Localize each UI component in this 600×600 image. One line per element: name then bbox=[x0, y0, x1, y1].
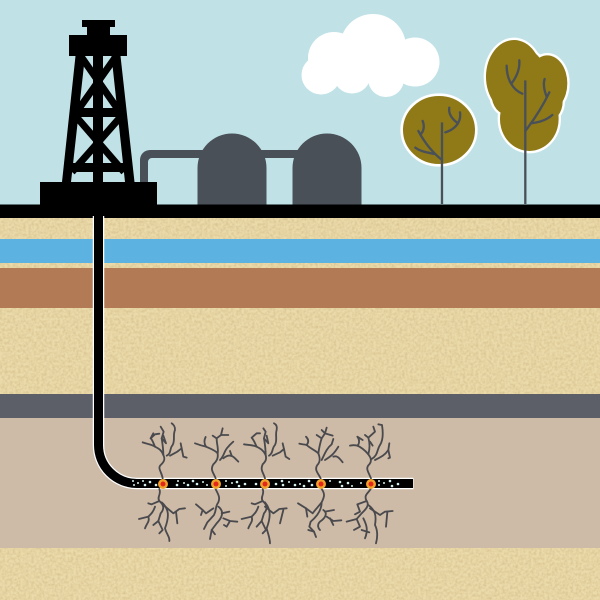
trunk and branches bbox=[507, 60, 552, 204]
fracture network lower 4 bbox=[298, 489, 341, 537]
right leg bbox=[112, 56, 134, 182]
sand texture bbox=[0, 218, 600, 239]
canopy fill bbox=[486, 40, 567, 151]
layer: taupe shale bbox=[0, 418, 600, 548]
wellbore casing bbox=[98, 210, 414, 484]
platform bbox=[69, 35, 127, 56]
canopy outline bbox=[486, 40, 567, 151]
fracture network lower 3 bbox=[242, 489, 270, 543]
cloud bbox=[302, 14, 440, 97]
ground layers bbox=[0, 218, 600, 600]
sky background bbox=[0, 0, 600, 205]
perforation points bbox=[158, 479, 376, 489]
fracture network lower 2 bbox=[196, 489, 237, 539]
derrick bbox=[40, 20, 157, 206]
layer: thick sand bbox=[0, 308, 600, 394]
layer: bottom sand bbox=[0, 548, 600, 600]
tank 1 bbox=[198, 134, 266, 205]
horizontal bars bbox=[70, 108, 127, 172]
layer: dark shale cap bbox=[0, 394, 600, 418]
canopy bbox=[402, 95, 476, 165]
fracture network upper 1 bbox=[143, 423, 187, 478]
sand texture bottom bbox=[0, 548, 600, 600]
perforation 2 bbox=[211, 479, 221, 489]
fracture network lower 1 bbox=[139, 489, 185, 541]
perforation 4 bbox=[316, 479, 326, 489]
perforation 5 bbox=[366, 479, 376, 489]
fracture network upper 5 bbox=[350, 424, 390, 478]
tree 1 bbox=[402, 95, 476, 204]
fracture network lower 3 right side bbox=[265, 507, 287, 523]
pipe bbox=[140, 150, 300, 182]
perforation 1 bbox=[158, 479, 168, 489]
crown neck bbox=[87, 27, 110, 36]
trunk and branches bbox=[415, 108, 460, 204]
perforation 3 bbox=[260, 479, 270, 489]
layer: upper sand bbox=[0, 218, 600, 239]
cross braces bbox=[72, 55, 124, 172]
base bbox=[40, 182, 157, 206]
layer: brown rock bbox=[0, 268, 600, 308]
fracture network lower 5 bbox=[347, 489, 393, 543]
sand texture thin bbox=[0, 263, 600, 268]
fracture network upper 3 bbox=[244, 423, 289, 478]
layer: aquifer water bbox=[0, 239, 600, 263]
ground surface bar bbox=[0, 204, 600, 218]
fracture network upper 2 bbox=[195, 428, 238, 478]
sand texture thick bbox=[0, 308, 600, 394]
fracture network upper 4 bbox=[299, 428, 343, 478]
storage tanks and pipe bbox=[140, 134, 362, 205]
layer: thin sand bbox=[0, 263, 600, 268]
left leg bbox=[62, 56, 85, 182]
centre post bbox=[93, 56, 103, 184]
proppant bubbles bbox=[132, 480, 399, 487]
tree 2 bbox=[486, 40, 567, 204]
crown cap bbox=[82, 20, 115, 27]
tank 2 bbox=[292, 134, 362, 205]
